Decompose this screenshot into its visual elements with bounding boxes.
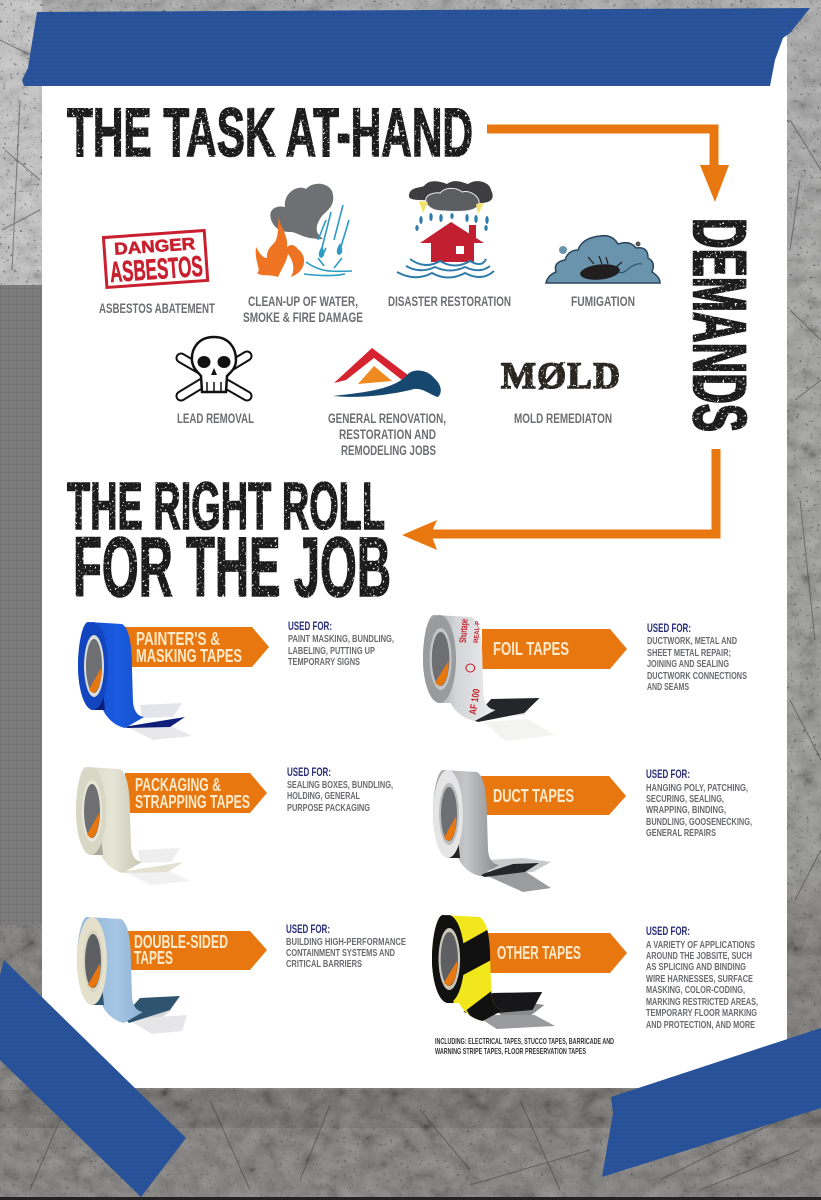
label: general renovation, restoration and remodeling jobs: GENERAL RENOVATION, xyxy=(328,411,446,426)
heading: the right roll for the job xyxy=(67,469,391,614)
arrow label: packaging and strapping tapes: PACKAGING & xyxy=(135,775,221,795)
text: used for other: MASKING, COLOR-CODING, xyxy=(646,984,745,996)
icon: danger asbestos stamp: ASBESTOS xyxy=(109,251,204,289)
text: used for foil: DUCTWORK CONNECTIONS xyxy=(647,670,747,682)
text: including other tape types xyxy=(435,1036,614,1056)
text: including other tape types: INCLUDING: ELECTRICAL TAPES, STUCCO TAPES, BARRICADE AND xyxy=(435,1036,614,1046)
label: clean-up of water, smoke and fire damage: CLEAN-UP OF WATER, xyxy=(248,294,358,309)
arrow label: duct tapes: DUCT TAPES xyxy=(493,786,574,806)
text: used for painter's: LABELING, PUTTING UP xyxy=(288,645,375,657)
label: lead removal: LEAD REMOVAL xyxy=(177,411,254,426)
text: used for double-sided xyxy=(286,924,406,970)
text: used for foil xyxy=(647,623,747,693)
arrow label: packaging and strapping tapes: STRAPPING TAPES xyxy=(135,792,250,812)
text: used for other: MARKING RESTRICTED AREAS, xyxy=(646,996,758,1008)
icon: grey duct tape roll xyxy=(433,770,551,892)
icon: skull and crossbones xyxy=(181,337,247,396)
label: general renovation, restoration and remodeling jobs: REMODELING JOBS xyxy=(341,443,436,458)
label: disaster restoration: DISASTER RESTORATION xyxy=(388,294,511,309)
label: general renovation, restoration and remodeling jobs xyxy=(328,411,446,458)
text: used for packaging: SEALING BOXES, BUNDLING, xyxy=(287,779,393,791)
text: including other tape types: WARNING STRIPE TAPES, FLOOR PRESERVATION TAPES xyxy=(435,1046,586,1056)
icon: silver foil tape roll: REAL-P xyxy=(473,621,482,643)
arrow: demands to right roll xyxy=(402,449,716,550)
text: used for double-sided: CONTAINMENT SYSTEMS AND xyxy=(286,947,395,959)
text: used for foil: SHEET METAL REPAIR; xyxy=(647,647,731,659)
arrow label: double-sided tapes xyxy=(127,931,267,970)
icon: storm flood house xyxy=(397,181,494,278)
panel: painter's and masking tapes xyxy=(78,621,394,740)
text: used for duct: HANGING POLY, PATCHING, xyxy=(646,782,748,794)
icon: blue painter's tape roll xyxy=(78,622,192,740)
icon: silver foil tape roll xyxy=(423,615,555,741)
icon: roof and hammer xyxy=(333,348,441,397)
arrow label: duct tapes xyxy=(481,776,626,815)
blue tape: bottom right xyxy=(602,1028,821,1177)
text: used for packaging: PURPOSE PACKAGING xyxy=(287,802,370,814)
arrow label: double-sided tapes: TAPES xyxy=(134,948,173,968)
panel: duct tapes xyxy=(433,769,752,892)
text: used for duct: SECURING, SEALING, xyxy=(646,793,724,805)
white paper panel xyxy=(42,35,787,1088)
label: mold remediaton: MOLD REMEDIATON xyxy=(514,411,612,426)
text: used for painter's: USED FOR: xyxy=(288,621,332,633)
panel: other tapes xyxy=(432,915,758,1056)
text: used for packaging: USED FOR: xyxy=(287,767,331,779)
text: used for double-sided: CRITICAL BARRIERS xyxy=(286,958,362,970)
heading: the right roll for the job: THE RIGHT ROLL xyxy=(67,469,385,544)
vertical heading: demands: DEMANDS xyxy=(678,218,761,432)
text: used for duct: GENERAL REPAIRS xyxy=(646,827,716,839)
arrow label: packaging and strapping tapes xyxy=(125,773,267,813)
arrow label: other tapes xyxy=(487,933,627,973)
panel: foil tapes xyxy=(423,615,747,741)
arrow label: painter's and masking tapes xyxy=(125,627,269,667)
text: used for foil: AND SEAMS xyxy=(647,681,689,693)
text: used for packaging xyxy=(287,767,393,814)
icon: fire smoke water xyxy=(256,184,352,277)
text: used for other: WIRE HARNESSES, SURFACE xyxy=(646,973,753,985)
icon: danger asbestos stamp: DANGER xyxy=(114,234,196,259)
text: used for double-sided: USED FOR: xyxy=(286,924,330,936)
text: used for other xyxy=(646,926,758,1031)
text: used for foil: USED FOR: xyxy=(647,623,691,635)
text: used for other: AROUND THE JOBSITE, SUCH xyxy=(646,950,752,962)
arrow label: painter's and masking tapes: MASKING TAPES xyxy=(136,646,242,666)
icon: danger asbestos stamp xyxy=(103,231,208,289)
text: used for other: TEMPORARY FLOOR MARKING xyxy=(646,1007,757,1019)
text: used for foil: JOINING AND SEALING xyxy=(647,658,729,670)
text: used for painter's xyxy=(288,621,394,668)
arrow label: foil tapes: FOIL TAPES xyxy=(493,639,569,659)
label: general renovation, restoration and remodeling jobs: RESTORATION AND xyxy=(339,427,436,442)
text: used for painter's: TEMPORARY SIGNS xyxy=(288,656,360,668)
text: used for packaging: HOLDING, GENERAL xyxy=(287,790,360,802)
arrow label: other tapes: OTHER TAPES xyxy=(497,943,581,963)
icon: cream packaging tape roll xyxy=(76,767,190,885)
icon: silver foil tape roll: AF 100 xyxy=(468,688,483,715)
panel: double-sided tapes xyxy=(77,917,406,1034)
icon: black and yellow tape roll xyxy=(432,915,555,1029)
panel: packaging and strapping tapes xyxy=(76,767,393,885)
grey duct tape behind the paper xyxy=(0,285,42,925)
label: asbestos abatement: ASBESTOS ABATEMENT xyxy=(99,301,216,316)
text: used for duct xyxy=(646,769,752,839)
text: used for duct: USED FOR: xyxy=(646,769,690,781)
arrow label: painter's and masking tapes: PAINTER'S & xyxy=(136,629,220,649)
text: used for other: AND PROTECTION, AND MORE xyxy=(646,1019,755,1031)
text: used for duct: BUNDLING, GOOSENECKING, xyxy=(646,816,752,828)
text: used for duct: WRAPPING, BINDING, xyxy=(646,804,726,816)
arrow label: double-sided tapes: DOUBLE-SIDED xyxy=(134,932,228,952)
icon: silver foil tape roll: Shurtape xyxy=(458,619,471,643)
arrow: task to demands xyxy=(487,129,729,202)
blue tape: bottom left xyxy=(0,960,186,1197)
text: used for other: USED FOR: xyxy=(646,926,690,938)
arrow label: foil tapes xyxy=(482,629,627,669)
icon: light blue double-sided tape roll xyxy=(77,917,187,1034)
text: used for other: AS SPLICING AND BINDING xyxy=(646,961,746,973)
title: the task at-hand: THE TASK AT-HAND xyxy=(67,94,473,171)
heading: the right roll for the job: FOR THE JOB xyxy=(73,520,391,614)
text: used for foil: DUCTWORK, METAL AND xyxy=(647,635,737,647)
icon: mold lettering: MØLD xyxy=(501,356,620,397)
text: used for double-sided: BUILDING HIGH-PERFORMANCE xyxy=(286,936,406,948)
blue tape: top xyxy=(22,8,810,86)
text: used for painter's: PAINT MASKING, BUNDLING, xyxy=(288,633,394,645)
label: clean-up of water, smoke and fire damage: SMOKE & FIRE DAMAGE xyxy=(243,310,363,325)
label: fumigation: FUMIGATION xyxy=(571,294,635,309)
text: used for other: A VARIETY OF APPLICATIONS xyxy=(646,939,755,951)
label: clean-up of water, smoke and fire damage xyxy=(243,294,363,325)
icon: fumigation cloud and bug xyxy=(546,236,660,283)
